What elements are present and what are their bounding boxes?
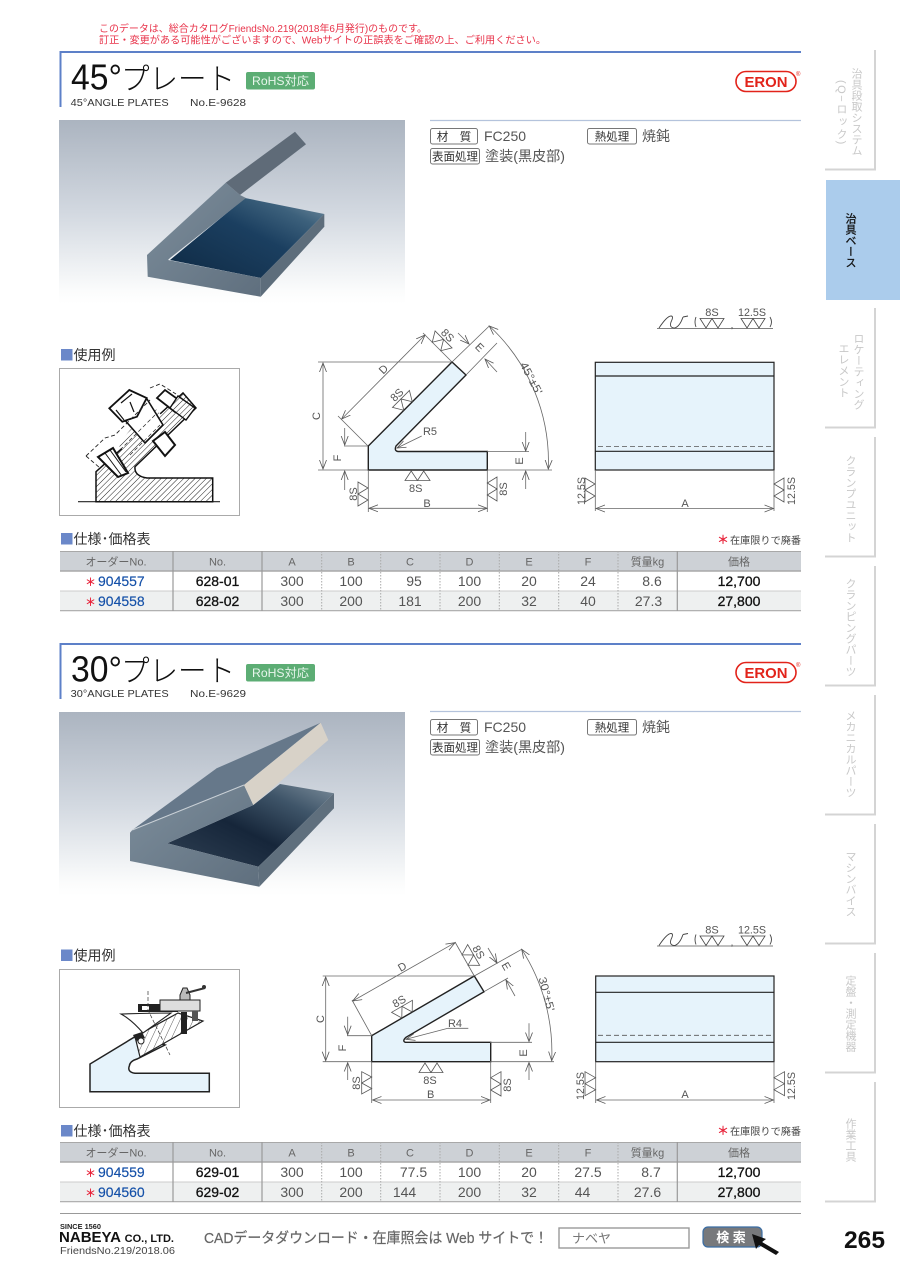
table: 45 degree plate: B — [347, 556, 355, 568]
title: 30° — [71, 648, 122, 690]
table: 30 degree plate: ＊ — [85, 1168, 96, 1180]
technical drawing: side view — [315, 939, 556, 1103]
notice: catalog data note: このデータは、総合カタログFriendsNo.219(2018年6月発行)のものです。 — [99, 22, 427, 35]
technical drawing: front view: 12.5S — [575, 1072, 587, 1100]
spec block: 塗装(黒皮部) — [485, 148, 565, 164]
table: 45 degree plate: 300 — [280, 573, 304, 589]
roughness legend: , — [731, 938, 733, 948]
badge: RoHS — [246, 72, 315, 90]
table: 45 degree plate: 95 — [406, 573, 422, 589]
surface finish marks: 8S — [348, 487, 360, 501]
spec block: 熱処理 — [595, 720, 630, 734]
surface finish marks: 8S — [409, 483, 422, 495]
dimension labels: D — [396, 960, 409, 975]
search box — [559, 1228, 689, 1248]
table: 30 degree plate: 100 — [339, 1164, 363, 1180]
surface finish marks: 8S — [498, 482, 510, 496]
table: 45 degree plate: 20 — [521, 573, 537, 589]
spec block: 焼鈍 — [642, 719, 670, 735]
dimension labels: R4 — [448, 1018, 462, 1030]
title — [71, 56, 235, 98]
technical drawing: front view — [576, 362, 798, 511]
spec block — [430, 712, 801, 755]
plate outline — [372, 976, 491, 1062]
note: stock only: ＊ — [717, 1124, 729, 1138]
tab: Q-lock — [825, 50, 875, 170]
dimension labels: E — [472, 341, 486, 355]
table: 45 degree plate: E — [525, 556, 533, 568]
plate outline — [368, 362, 487, 470]
spec block: 表面処理 — [432, 740, 478, 754]
table: 30 degree plate — [60, 1142, 801, 1202]
technical drawing: front view: A — [681, 498, 689, 510]
table: 45 degree plate: 181 — [398, 593, 422, 609]
table: 45 degree plate — [60, 551, 801, 611]
table: 45 degree plate: 100 — [458, 573, 481, 589]
dimension labels: R5 — [423, 426, 437, 438]
table: 45 degree plate: A — [288, 556, 296, 568]
company logo — [59, 1224, 175, 1257]
search box: ナベヤ — [572, 1231, 611, 1246]
note: stock only — [717, 533, 801, 547]
logo: ERON — [736, 662, 801, 682]
table: 45 degree plate: 32 — [521, 593, 537, 609]
tab: machine vise: マシンバイス — [844, 851, 856, 917]
section: 30 degree plate — [59, 644, 801, 1202]
spec block — [430, 120, 801, 164]
roughness legend: 12.5S — [738, 307, 766, 319]
roughness legend: 12.5S — [738, 924, 766, 936]
tab: Q-lock: 治具段取システム — [850, 67, 862, 156]
surface finish marks: 8S — [469, 944, 487, 961]
usage drawing — [60, 368, 240, 516]
technical drawing: front view: 12.5S — [786, 1072, 798, 1100]
roughness legend — [657, 307, 773, 330]
dimension labels: E — [499, 960, 513, 973]
tab: surface plate — [825, 953, 875, 1072]
usage drawing — [60, 970, 240, 1108]
section: 45 degree plate — [59, 52, 801, 611]
heading: usage example: 使用例 — [74, 347, 116, 363]
table: 45 degree plate: ＊ — [85, 597, 96, 609]
subtitle: 30°ANGLE PLATES — [71, 688, 169, 700]
dimension labels: D — [377, 363, 391, 377]
table: 45 degree plate: F — [585, 556, 592, 568]
tab: machine vise — [825, 824, 875, 944]
table: 45 degree plate: 24 — [580, 573, 596, 589]
table: 30 degree plate: 8.7 — [641, 1164, 661, 1180]
photo: 45 degree plate — [59, 120, 405, 304]
roughness legend — [657, 924, 773, 948]
spec block: 表面処理 — [432, 150, 478, 164]
table: 45 degree plate: 8.6 — [642, 573, 662, 589]
table: 45 degree plate: 100 — [339, 573, 363, 589]
surface finish marks — [348, 323, 510, 506]
logo: ERON: ® — [796, 71, 801, 78]
dimension labels: C — [311, 412, 323, 420]
table: 45 degree plate: 300 — [280, 593, 304, 609]
dimension lines — [323, 942, 554, 1103]
tab: clamping parts — [825, 566, 875, 686]
table: 45 degree plate: ＊ — [85, 577, 96, 589]
table: 45 degree plate: 質量kg — [631, 554, 664, 568]
table: 30 degree plate: 629-01 — [196, 1164, 240, 1180]
table: 30 degree plate: 100 — [458, 1164, 481, 1180]
company logo: FriendsNo.219/2018.06 — [60, 1246, 175, 1257]
section header frame — [60, 52, 801, 107]
table: 30 degree plate: 200 — [458, 1184, 481, 1200]
table: 30 degree plate: 質量kg — [631, 1146, 664, 1160]
dimension labels: 30°±5' — [536, 976, 556, 1013]
spec block: 材 質 — [437, 720, 471, 734]
table: 30 degree plate: 27,800 — [718, 1184, 761, 1200]
tab: clamping parts: クランピングパーツ — [844, 578, 856, 677]
section header frame — [60, 644, 801, 699]
heading: spec and price table: 仕様･価格表 — [74, 1123, 150, 1139]
heading: usage example: 使用例 — [74, 948, 116, 964]
tab: surface plate: 定盤・測定機器 — [844, 975, 856, 1053]
spec block: 塗装(黒皮部) — [485, 739, 565, 755]
table: 45 degree plate: 12,700 — [718, 573, 761, 589]
subtitle: No.E-9628 — [190, 97, 246, 109]
table: 30 degree plate: A — [288, 1148, 296, 1160]
logo: ERON: ERON — [744, 665, 788, 682]
table: 30 degree plate: 32 — [521, 1184, 537, 1200]
surface finish marks: 8S — [438, 327, 456, 345]
subtitle — [71, 688, 246, 700]
table: 45 degree plate: 628-01 — [196, 573, 240, 589]
table: 30 degree plate: 300 — [280, 1184, 304, 1200]
spec block: 熱処理 — [595, 130, 630, 144]
table: 30 degree plate: 12,700 — [718, 1164, 761, 1180]
tab: work tools — [825, 1082, 875, 1202]
tab: mechanical parts: メカニカルパーツ — [844, 710, 856, 798]
logo: ERON: ® — [796, 662, 801, 669]
notice: catalog data note: 訂正・変更がある可能性がございますので、Webサイトの正誤表をご確認の上、ご利用ください。 — [99, 34, 546, 46]
dimension lines — [318, 326, 552, 512]
table: 30 degree plate: 904560 — [98, 1184, 145, 1200]
search button — [703, 1227, 762, 1247]
roughness legend: , — [731, 320, 733, 330]
table: 30 degree plate: D — [466, 1148, 474, 1160]
spec block: FC250 — [484, 128, 526, 144]
tab: active jig base — [826, 180, 900, 300]
note: stock only: 在庫限りで廃番 — [730, 534, 801, 547]
dimension labels: E — [518, 1049, 530, 1057]
tab: work tools: 作業工具 — [844, 1118, 856, 1162]
table: 45 degree plate: 27,800 — [718, 593, 761, 609]
table: 30 degree plate: C — [406, 1148, 414, 1160]
dimension labels — [315, 960, 556, 1101]
photo: 30 degree plate — [59, 712, 405, 896]
dimension labels: 45°±5' — [517, 360, 544, 397]
table: 30 degree plate: 629-02 — [196, 1184, 240, 1200]
badge: RoHS: RoHS対応 — [252, 666, 309, 680]
search button: 検 索 — [716, 1230, 746, 1245]
tab: clamp unit: クランプユニット — [844, 455, 856, 543]
table: 45 degree plate: D — [466, 556, 474, 568]
table: 30 degree plate: E — [525, 1148, 533, 1160]
table: 30 degree plate: F — [585, 1148, 592, 1160]
surface finish marks — [351, 939, 514, 1096]
title — [71, 648, 235, 690]
tab: locating — [825, 308, 875, 428]
subtitle: No.E-9629 — [190, 688, 246, 700]
dimension labels: F — [337, 1044, 349, 1051]
table: 30 degree plate: B — [347, 1148, 355, 1160]
surface finish marks: 8S — [423, 1075, 437, 1087]
tab: locating: エレメント — [837, 343, 849, 398]
table: 30 degree plate: 27.5 — [574, 1164, 602, 1180]
spec block: FC250 — [484, 719, 526, 735]
table: 30 degree plate: 27.6 — [634, 1184, 661, 1200]
dimension labels: B — [427, 1089, 434, 1101]
note: stock only — [717, 1124, 801, 1138]
notice: catalog data note — [99, 22, 546, 46]
table: 45 degree plate: オーダーNo. — [85, 554, 147, 568]
technical drawing: front view — [575, 976, 798, 1103]
tab: active jig base: 治具ベース — [844, 212, 856, 268]
table: 45 degree plate: 200 — [339, 593, 363, 609]
subtitle: 45°ANGLE PLATES — [71, 97, 169, 109]
table: 30 degree plate: 価格 — [728, 1146, 750, 1160]
tab: Q-lock: (Q−ロック) — [835, 80, 847, 146]
technical drawing: front view: A — [681, 1089, 689, 1101]
roughness legend: 8S — [705, 924, 719, 936]
page number: 265 — [844, 1227, 885, 1254]
table: 30 degree plate: ＊ — [85, 1188, 96, 1200]
roughness legend: 8S — [705, 307, 719, 319]
spec block: 材 質 — [437, 130, 471, 144]
title: プレート — [121, 64, 235, 96]
badge: RoHS — [246, 664, 315, 682]
heading: spec and price table: 仕様･価格表 — [74, 531, 150, 547]
tab: clamp unit — [825, 437, 875, 556]
title: 45° — [71, 56, 122, 98]
table: 45 degree plate: 628-02 — [196, 593, 240, 609]
CAD download message: CADデータダウンロード・在庫照会は Web サイトで！ — [204, 1229, 548, 1247]
dimension labels: B — [423, 498, 431, 510]
surface finish marks: 8S — [502, 1078, 514, 1092]
table: 30 degree plate: 77.5 — [400, 1164, 427, 1180]
table: 30 degree plate: 144 — [393, 1184, 416, 1200]
dimension labels: F — [332, 454, 344, 461]
surface finish marks: 8S — [388, 386, 406, 404]
dimension labels: E — [514, 457, 526, 465]
table: 45 degree plate: 40 — [580, 593, 596, 609]
table: 30 degree plate: 44 — [575, 1184, 590, 1200]
company logo: SINCE 1560 — [60, 1224, 101, 1231]
badge: RoHS: RoHS対応 — [252, 74, 309, 88]
table: 30 degree plate: オーダーNo. — [85, 1146, 147, 1160]
table: 45 degree plate: 904558 — [98, 593, 145, 609]
spec block: 焼鈍 — [642, 128, 670, 144]
table: 30 degree plate: 20 — [521, 1164, 537, 1180]
technical drawing: front view: 12.5S — [786, 477, 798, 505]
note: stock only: 在庫限りで廃番 — [730, 1125, 801, 1138]
table: 30 degree plate: 300 — [280, 1164, 304, 1180]
technical drawing: side view — [311, 323, 552, 512]
logo: ERON: ERON — [744, 74, 788, 91]
title: プレート — [121, 656, 235, 688]
note: stock only: ＊ — [717, 533, 729, 547]
table: 45 degree plate: No. — [209, 556, 226, 568]
table: 30 degree plate: 200 — [339, 1184, 363, 1200]
table: 30 degree plate: 904559 — [98, 1164, 145, 1180]
table: 45 degree plate: 904557 — [98, 573, 145, 589]
table: 45 degree plate: 27.3 — [635, 593, 662, 609]
company logo: NABEYA CO., LTD. — [59, 1229, 174, 1246]
dimension labels: C — [315, 1015, 327, 1023]
footer — [59, 1214, 885, 1257]
technical drawing: front view: 12.5S — [576, 477, 588, 505]
table: 45 degree plate: C — [406, 556, 414, 568]
logo: ERON — [736, 71, 801, 92]
table: 45 degree plate: 価格 — [728, 554, 750, 568]
dimension labels — [311, 341, 544, 510]
table: 45 degree plate: 200 — [458, 593, 481, 609]
surface finish marks: 8S — [351, 1076, 363, 1090]
side tabs — [825, 50, 900, 1202]
table: 30 degree plate: No. — [209, 1148, 226, 1160]
surface finish marks: 8S — [391, 993, 408, 1011]
tab: mechanical parts — [825, 695, 875, 814]
icon: cursor arrow — [752, 1234, 779, 1255]
tab: locating: ロケーティング — [852, 333, 864, 410]
subtitle — [71, 97, 246, 109]
